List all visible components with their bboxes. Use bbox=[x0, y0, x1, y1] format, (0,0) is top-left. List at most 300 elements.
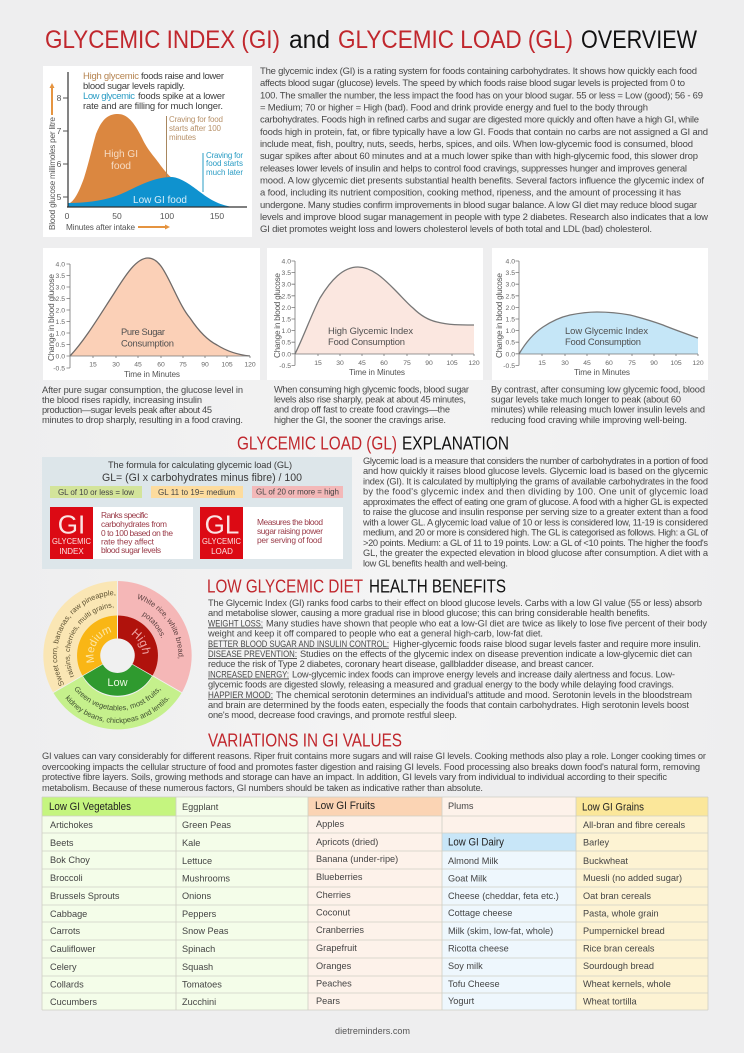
x tick labels: 15 bbox=[89, 362, 97, 368]
column: fruits: Oranges bbox=[316, 961, 352, 971]
high GI craving note: starts after 100 bbox=[169, 124, 222, 133]
area labels: High GI bbox=[104, 149, 138, 160]
chart intro text: foods raise and lower bbox=[141, 71, 224, 82]
column: vegetables continued: Squash bbox=[182, 962, 213, 972]
segment: medium: raisins, cherries, multi grains, bbox=[65, 604, 114, 678]
axis labels bbox=[47, 274, 180, 379]
pill: medium: GL 11 to 19= medium bbox=[158, 488, 235, 497]
y tick labels: 4.0 bbox=[506, 258, 515, 266]
high GI craving note: Craving for food bbox=[169, 115, 223, 124]
y tick labels: 1.0 bbox=[56, 330, 65, 338]
card: GL: Measures the blood bbox=[257, 517, 323, 527]
column: plums and dairy: Milk (skim, low-fat, whole) bbox=[448, 926, 553, 936]
benefits paragraph: BETTER BLOOD SUGAR AND INSULIN CONTROL: bbox=[208, 639, 389, 649]
high GI craving note bbox=[166, 115, 223, 177]
column: vegetables: Artichokes bbox=[50, 820, 93, 830]
column: fruits: Apples bbox=[316, 819, 344, 829]
axis labels: Change in blood glucose bbox=[495, 273, 504, 358]
caption: low glycemic: minutes) while releasing much lower insulin levels and bbox=[491, 404, 705, 414]
y tick labels: 6 bbox=[57, 159, 62, 169]
glycemic index paragraph: levels and improve blood sugar management in people with type 2 diabetes. Research also indicates that a low bbox=[260, 212, 708, 223]
column: vegetables: Cucumbers bbox=[50, 997, 97, 1007]
column: plums and dairy: Cheese (cheddar, feta etc.) bbox=[448, 891, 559, 901]
column: grains: Rice bran cereals bbox=[583, 944, 655, 954]
x tick labels: 105 bbox=[221, 362, 233, 368]
y tick labels: 2.5 bbox=[506, 293, 515, 300]
column: vegetables: Broccoli bbox=[50, 873, 83, 883]
x tick labels: 45 bbox=[134, 362, 142, 368]
benefits paragraph: The chemical serotonin determines an individual's attitude and mood. Serotonin levels in the bloodstream bbox=[276, 690, 692, 700]
y tick labels bbox=[279, 258, 291, 370]
glycemic load paragraph: with a lower GL. A glycemic load value of 10 or less is considered low, 11-19 is considered bbox=[362, 517, 708, 527]
axis labels: Time in Minutes bbox=[124, 370, 180, 379]
area labels: Low GI food bbox=[133, 194, 187, 206]
y tick labels: 1.5 bbox=[506, 316, 515, 324]
benefits paragraph: weight and keep it off compared to people who eat a general high-carb, low-fat diet. bbox=[207, 629, 543, 639]
y tick labels: 0.5 bbox=[506, 340, 515, 347]
column: grains: Oat bran cereals bbox=[583, 891, 651, 901]
panel: pure sugar chart bbox=[43, 248, 260, 380]
column: vegetables: Cabbage bbox=[50, 909, 87, 919]
column: vegetables continued: Kale bbox=[182, 838, 200, 848]
high GI area bbox=[68, 114, 172, 207]
curve label bbox=[565, 325, 648, 347]
y tick labels: 3.0 bbox=[506, 282, 515, 289]
variations paragraph: metabolism. Because of these numerous factors, GI numbers should be taken as indicative rather than absolute. bbox=[42, 783, 483, 793]
y tick labels: 0.5 bbox=[56, 342, 65, 349]
title: OVERVIEW bbox=[581, 26, 697, 54]
column: plums and dairy: Soy milk bbox=[448, 961, 483, 971]
y tick labels: -0.5 bbox=[503, 363, 515, 370]
table: low GI foods bbox=[42, 797, 708, 1010]
caption: low glycemic: sugar levels take much longer to peak (about 60 bbox=[491, 394, 681, 404]
column: plums and dairy: Goat Milk bbox=[448, 874, 487, 884]
x tick labels: 45 bbox=[358, 360, 366, 367]
column: fruits: Apricots (dried) bbox=[316, 837, 378, 847]
axis labels: Change in blood glucose bbox=[47, 274, 56, 361]
benefits paragraph: reduce the risk of Type 2 diabetes, coronary heart disease, gallbladder disease, and breast cancer. bbox=[208, 659, 594, 669]
benefits paragraph: WEIGHT LOSS: bbox=[208, 618, 263, 628]
card: GL bbox=[200, 507, 343, 559]
benefits paragraph: The Glycemic Index (GI) ranks food carbs to their effect on blood glucose levels. Carbs with a low GI value (55 or less) absorb bbox=[208, 598, 702, 608]
heading: glycemic load explanation bbox=[237, 434, 509, 454]
low glycemic curve bbox=[519, 312, 698, 354]
column: vegetables continued: Peppers bbox=[182, 909, 217, 919]
x tick labels: 30 bbox=[336, 360, 344, 367]
card: GI: rate they affect bbox=[101, 536, 155, 546]
area labels: food bbox=[111, 161, 131, 172]
high GI craving note: minutes bbox=[169, 133, 196, 142]
x tick labels: 15 bbox=[314, 360, 322, 367]
column: grains: Wheat tortilla bbox=[583, 996, 638, 1006]
glycemic load paragraph: by the food's glycemic index and then dividing by 100. One unit of glycemic load bbox=[363, 487, 708, 497]
column: vegetables continued: Eggplant bbox=[182, 802, 219, 812]
column: grains: All-bran and fibre cereals bbox=[583, 820, 686, 830]
benefits paragraph: and brain are determined by the foods eaten, especially the foods that contain carbohydrates. High serotonin levels boost bbox=[208, 700, 689, 710]
benefits paragraph: Many studies have shown that people who eat a low-GI diet are twice as likely to lose five percent of their body bbox=[266, 618, 707, 628]
column: fruits: Cherries bbox=[316, 890, 351, 900]
glycemic load paragraph: to raise the glucose and insulin response per serving size to a greater extent than a food bbox=[363, 507, 708, 517]
glycemic index paragraph: a food, including its nutrient composition, cooking method, ripeness, and the amount of processing it has bbox=[260, 188, 681, 199]
heading: low glycemic diet benefits bbox=[207, 576, 506, 596]
pill: high bbox=[252, 486, 343, 498]
glycemic index paragraph: 100. The smaller the number, the less impact the food has on your blood sugar. 55 or less = Low (good); 56 - 69 bbox=[260, 90, 703, 101]
variations paragraph: GI values can vary considerably for different reasons. Riper fruit contains more sugars and will raise GI levels. Cooking methods also play a role. Longer cooking times or bbox=[42, 751, 706, 761]
card: GL: per serving of food bbox=[257, 535, 322, 545]
y tick labels: 3.5 bbox=[56, 273, 65, 280]
column: vegetables: Cauliflower bbox=[50, 944, 95, 954]
formula text: GL= (GI x carbohydrates minus fibre) / 100 bbox=[102, 472, 302, 484]
caption: low glycemic: By contrast, after consuming low glycemic food, blood bbox=[491, 384, 705, 394]
x tick labels: 45 bbox=[583, 360, 591, 367]
x tick labels: 105 bbox=[670, 360, 682, 367]
benefits paragraph: Low-glycemic index foods can improve energy levels and increase daily alertness and focus. Low- bbox=[292, 669, 675, 679]
column: fruits: Cranberries bbox=[316, 925, 364, 935]
column: grains bbox=[582, 802, 686, 1006]
column: fruits: Grapefruit bbox=[316, 943, 357, 953]
column: grains: Wheat kernels, whole bbox=[583, 979, 671, 989]
y tick labels: 1.0 bbox=[282, 328, 291, 335]
x tick labels: 30 bbox=[112, 362, 120, 368]
glycemic load paragraph: index (GI). It is calculated by multiplying the grams of available carbohydrates in the food bbox=[363, 476, 708, 486]
column: grains: Muesli (no added sugar) bbox=[583, 873, 682, 883]
pill: high: GL of 20 or more = high bbox=[256, 488, 339, 496]
column: grains: Buckwheat bbox=[583, 856, 628, 866]
column: vegetables: Low GI Vegetables bbox=[49, 801, 131, 813]
axis labels: Change in blood glucose bbox=[273, 273, 282, 358]
caption: pure sugar: minutes to drop sharply, resulting in a food craving. bbox=[42, 415, 243, 425]
card: GI: blood sugar levels bbox=[101, 545, 161, 555]
x tick labels bbox=[65, 211, 224, 221]
heading: variations in GI values: VARIATIONS IN GI VALUES bbox=[208, 730, 402, 750]
x tick labels: 120 bbox=[468, 360, 480, 367]
column: fruits: Coconut bbox=[316, 908, 351, 918]
x tick labels: 60 bbox=[380, 360, 388, 367]
chart intro text: rate and are filling for much longer. bbox=[83, 101, 223, 112]
benefits paragraph: Higher-glycemic foods raise blood sugar levels faster and require more insulin. bbox=[393, 639, 701, 649]
card: GI: 0 to 100 based on the bbox=[101, 528, 173, 538]
x tick labels: 105 bbox=[446, 360, 458, 367]
column: vegetables: Brussels Sprouts bbox=[50, 891, 120, 901]
column: plums and dairy: Tofu Cheese bbox=[448, 979, 500, 989]
y tick labels: 3.5 bbox=[282, 270, 291, 277]
segment: high: potatoes. bbox=[142, 612, 164, 638]
column: grains: Barley bbox=[583, 838, 609, 848]
column: fruits: Pears bbox=[316, 996, 340, 1006]
y tick labels: 0.0 bbox=[282, 351, 291, 358]
segment: high bbox=[118, 581, 192, 692]
axis labels: Time in Minutes bbox=[574, 368, 630, 377]
column: vegetables continued: Snow Peas bbox=[182, 926, 229, 936]
heading: low glycemic diet benefits: LOW GLYCEMIC DIET bbox=[207, 576, 363, 596]
chart intro text: Low glycemic bbox=[83, 91, 135, 102]
chart intro text: foods spike at a lower bbox=[138, 91, 225, 102]
caption: pure sugar: After pure sugar consumption, the glucose level in bbox=[42, 385, 243, 395]
caption: high glycemic bbox=[274, 384, 469, 425]
title: and bbox=[289, 26, 330, 54]
column: grains: Pasta, whole grain bbox=[583, 908, 659, 918]
card: GI: GI bbox=[58, 510, 85, 540]
curve label: Consumption bbox=[121, 338, 174, 348]
column: vegetables: Carrots bbox=[50, 926, 81, 936]
benefits paragraph: and metabolise slower, causing a more gradual rise in blood glucose; this can bring considerable health benefits. bbox=[208, 608, 650, 618]
glycemic index paragraph: undergone. Many studies confirm improvements in blood sugar balance. A low GI diet may reduce blood sugar bbox=[260, 200, 697, 211]
y tick labels: 5 bbox=[57, 192, 62, 202]
benefits paragraph: Studies on the effects of the glycemic index on disease prevention indicate a low-glycemic diet can bbox=[300, 649, 692, 659]
y tick labels bbox=[503, 258, 515, 370]
footer: dietreminders.com bbox=[335, 1026, 410, 1036]
x tick labels: 75 bbox=[628, 360, 636, 367]
glycemic index paragraph: affects blood sugar (glucose) levels. The speed by which foods raise blood sugar levels is projected from 0 to bbox=[260, 78, 685, 89]
heading: low glycemic diet benefits: HEALTH BENEFITS bbox=[369, 576, 506, 596]
curve label: Food Consumption bbox=[565, 336, 641, 347]
y tick labels: 0.5 bbox=[282, 340, 291, 347]
column: plums and dairy: Plums bbox=[448, 801, 474, 811]
glycemic index paragraph: foods high in protein, fat, or fibre typically have a low GI. Foods that contain no carbs are not assigned a GI and bbox=[260, 127, 708, 138]
panel: low glycemic chart bbox=[492, 248, 708, 380]
area labels bbox=[104, 149, 187, 206]
column: grains: Sourdough bread bbox=[583, 961, 654, 971]
x tick labels: 60 bbox=[605, 360, 613, 367]
card: GL: sugar raising power bbox=[257, 526, 323, 536]
glycemic index paragraph: GI diet promotes weight loss and lowers cholesterol levels of both total and LDL (bad) cholesterol. bbox=[260, 224, 652, 235]
column: vegetables: Celery bbox=[50, 962, 77, 972]
glycemic load paragraph: GL, the greater the expected elevation in blood glucose after consumption. A diet with a bbox=[363, 548, 709, 558]
benefits paragraph: HAPPIER MOOD: bbox=[208, 690, 273, 700]
caption: low glycemic: reducing food craving while improving well-being. bbox=[491, 415, 687, 425]
caption: pure sugar: the blood rises rapidly, increasing insulin bbox=[42, 395, 202, 405]
y tick labels: 2.0 bbox=[506, 305, 515, 312]
low GI craving note: much later bbox=[206, 168, 243, 177]
axis labels bbox=[273, 273, 405, 377]
formula text bbox=[102, 460, 302, 484]
card: GI: carbohydrates from bbox=[101, 519, 167, 529]
card: GI: INDEX bbox=[59, 547, 84, 556]
column: vegetables continued: Mushrooms bbox=[182, 874, 230, 884]
column: fruits: Low GI Fruits bbox=[315, 800, 375, 812]
benefits paragraph: glycemic foods are digested slowly, releasing a measured and gradual energy to the body while delaying food cravings. bbox=[208, 680, 674, 690]
segment: medium: Medium bbox=[86, 627, 112, 663]
panel: blood glucose chart bbox=[43, 66, 252, 237]
low GI craving note: food starts bbox=[206, 159, 243, 168]
benefits paragraph: INCREASED ENERGY: bbox=[208, 669, 289, 679]
card: GL: GLYCEMIC bbox=[202, 537, 241, 546]
caption: pure sugar bbox=[42, 385, 243, 425]
y tick labels: 7 bbox=[57, 126, 62, 136]
x tick labels: 120 bbox=[244, 362, 256, 368]
glycemic index paragraph: include meat, fish, poultry, nuts, seeds, herbs, spices, and oils. When low-glycemic food is consumed, blood bbox=[260, 139, 693, 150]
low GI craving note: Craving for bbox=[206, 151, 243, 160]
segment: low: Green vegetables, most fruits, bbox=[75, 686, 162, 710]
y tick labels: 2.5 bbox=[56, 296, 65, 303]
column: vegetables: Beets bbox=[50, 838, 74, 848]
axis labels: Time in Minutes bbox=[349, 368, 405, 377]
y tick labels: 3.0 bbox=[282, 282, 291, 289]
column: fruits: Blueberries bbox=[316, 872, 363, 882]
low GI area bbox=[68, 177, 233, 207]
glycemic index paragraph: releases lower levels of insulin and helps to control food cravings, suppresses hunger and improves general bbox=[260, 163, 687, 174]
column: vegetables: Bok Choy bbox=[50, 855, 90, 865]
x tick labels: 15 bbox=[538, 360, 546, 367]
chart intro text: High glycemic bbox=[83, 71, 139, 82]
y tick labels: 2.5 bbox=[282, 293, 291, 300]
segment: high: High bbox=[132, 628, 150, 654]
card: GI: Ranks specific bbox=[101, 510, 148, 520]
column: vegetables continued: Zucchini bbox=[182, 997, 216, 1007]
column: fruits: Banana (under-ripe) bbox=[316, 854, 398, 864]
curve label: Pure Sugar bbox=[121, 326, 165, 337]
high glycemic curve bbox=[295, 267, 474, 354]
card: GI: GLYCEMIC bbox=[52, 537, 91, 546]
variations paragraph: overcooking impacts the cellular structure of food and promotes faster digestion and raising GI levels. Food processing also breaks down food's natural form, removing bbox=[42, 762, 700, 772]
column: vegetables continued: Green Peas bbox=[182, 820, 231, 830]
card: GI bbox=[50, 507, 193, 559]
y tick labels: 3.0 bbox=[56, 284, 65, 292]
y tick labels: 2.0 bbox=[56, 308, 65, 314]
glycemic load paragraph: medium, and 20 or more is considered high. The GL is categorised as follows. High: a GL of bbox=[363, 528, 708, 538]
benefits paragraph: DISEASE PREVENTION: bbox=[208, 649, 297, 659]
x tick labels: 90 bbox=[425, 360, 433, 367]
segment: medium: Sweet corn, bananas, raw pineapple, bbox=[52, 590, 116, 686]
chart intro text bbox=[83, 71, 225, 112]
formula text: The formula for calculating glycemic load (GL) bbox=[108, 460, 292, 470]
y tick labels: 0.0 bbox=[506, 351, 515, 358]
benefits paragraph: one's mood, decrease food cravings, and promote restful sleep. bbox=[208, 710, 457, 720]
chart: glycemic food wheel bbox=[43, 581, 192, 730]
column: plums and dairy: Almond Milk bbox=[448, 856, 498, 866]
axes bbox=[63, 72, 247, 207]
column: grains: Pumpernickel bread bbox=[583, 926, 665, 936]
card: GL: GL bbox=[205, 510, 239, 540]
glycemic index paragraph: The glycemic index (GI) is a rating system for foods containing carbohydrates. It shows how quickly each food bbox=[260, 66, 697, 77]
x tick labels: 0 bbox=[65, 211, 70, 221]
y tick labels: 0.0 bbox=[56, 354, 65, 360]
column: fruits: Peaches bbox=[316, 978, 352, 988]
glycemic load paragraph bbox=[362, 456, 709, 568]
column: plums and dairy: Cottage cheese bbox=[448, 908, 512, 918]
y tick labels: 4.0 bbox=[56, 262, 65, 268]
glycemic index paragraph bbox=[260, 66, 708, 235]
x axis label with arrow: Minutes after intake bbox=[66, 223, 135, 232]
column: vegetables continued bbox=[182, 802, 231, 1007]
title: GLYCEMIC LOAD (GL) bbox=[338, 26, 573, 54]
column: fruits bbox=[315, 800, 398, 1006]
x tick labels: 30 bbox=[561, 360, 569, 367]
glycemic index paragraph: sugar spikes after about 60 minutes and at a much lower spike than with high-glycemic food, this slower drop bbox=[260, 151, 698, 162]
segment: low: kidney beans, chickpeas and lentils. bbox=[66, 695, 170, 724]
y tick labels: 2.0 bbox=[282, 305, 291, 312]
panel: high glycemic chart bbox=[267, 248, 483, 380]
variations paragraph: protective fibre layers. Soils, growing methods and storage can have an impact. In addition, GI levels vary from individual to individual according to their specific bbox=[42, 772, 667, 782]
segment: low bbox=[54, 664, 182, 730]
glycemic load paragraph: >20 points. Medium: a GL of 11 to 19 points. Low: a GL of <10 points. The higher the food's bbox=[363, 538, 708, 548]
x tick labels: 100 bbox=[160, 211, 174, 221]
glycemic load paragraph: Glycemic load is a measure that considers the number of carbohydrates in a portion of food bbox=[363, 456, 708, 466]
x tick labels: 90 bbox=[201, 362, 209, 368]
column: vegetables continued: Tomatoes bbox=[182, 980, 222, 990]
panel: glycemic load formula bbox=[42, 457, 352, 569]
x tick labels: 60 bbox=[157, 362, 165, 368]
y tick labels: 1.0 bbox=[506, 328, 515, 335]
x tick labels bbox=[314, 360, 480, 367]
y tick labels: 1.5 bbox=[56, 319, 65, 326]
title bbox=[45, 26, 697, 54]
title: GLYCEMIC INDEX (GI) bbox=[45, 26, 280, 54]
pill: low bbox=[50, 486, 142, 498]
x tick labels: 50 bbox=[112, 211, 122, 221]
x tick labels bbox=[89, 362, 256, 368]
y tick labels bbox=[53, 262, 65, 372]
column: vegetables continued: Spinach bbox=[182, 944, 215, 954]
heading: glycemic load explanation: EXPLANATION bbox=[402, 434, 509, 454]
curve label bbox=[328, 325, 413, 347]
pill: medium bbox=[151, 486, 243, 498]
x tick labels bbox=[538, 360, 704, 367]
column: grains: Low GI Grains bbox=[582, 802, 644, 814]
pill: low: GL of 10 or less = low bbox=[58, 488, 134, 497]
segment: low: Low bbox=[107, 677, 128, 689]
glycemic load paragraph: low GL benefits health and well-being. bbox=[363, 558, 508, 568]
column: vegetables bbox=[49, 801, 131, 1007]
axis labels bbox=[495, 273, 630, 377]
column: vegetables: Collards bbox=[50, 980, 84, 990]
y tick labels: 1.5 bbox=[282, 316, 291, 324]
glycemic index paragraph: carbohydrates. Foods high in refined carbs and sugar are digested more quickly and often have a high GI, while bbox=[260, 115, 699, 126]
x tick labels: 90 bbox=[650, 360, 658, 367]
glycemic load paragraph: and how quickly it raises blood glucose levels. Glycemic load is based on the glycemic bbox=[363, 466, 708, 476]
column backgrounds bbox=[42, 797, 708, 1010]
x tick labels: 75 bbox=[403, 360, 411, 367]
segment: high: White rice, white bread, bbox=[138, 594, 184, 658]
benefits paragraph bbox=[207, 598, 707, 720]
curve label: Food Consumption bbox=[328, 336, 405, 347]
y tick labels: -0.5 bbox=[279, 363, 291, 370]
x axis label with arrow bbox=[66, 223, 170, 232]
x tick labels: 150 bbox=[210, 211, 224, 221]
curve label: High Glycemic Index bbox=[328, 325, 413, 336]
column: vegetables continued: Lettuce bbox=[182, 856, 212, 866]
column: plums and dairy: Yogurt bbox=[448, 996, 475, 1006]
card: GL: LOAD bbox=[211, 547, 233, 556]
y tick labels: 8 bbox=[57, 93, 62, 103]
glycemic load paragraph: approximates the effect of eating one gram of glucose. A food with a higher GL is expected bbox=[363, 497, 708, 507]
x tick labels: 120 bbox=[692, 360, 704, 367]
column: plums and dairy bbox=[448, 801, 559, 1006]
caption: pure sugar: production—sugar levels peak after about 45 bbox=[42, 405, 212, 415]
pure sugar curve bbox=[70, 258, 250, 356]
y tick labels: -0.5 bbox=[53, 366, 65, 372]
caption: high glycemic: levels also rise sharply, peak at about 45 minutes, bbox=[274, 394, 466, 404]
y tick labels: 4.0 bbox=[282, 258, 291, 266]
low GI craving note bbox=[203, 151, 243, 192]
column: plums and dairy: Low GI Dairy bbox=[448, 836, 505, 848]
column: vegetables continued: Onions bbox=[182, 891, 212, 901]
y tick labels bbox=[57, 93, 62, 202]
variations paragraph bbox=[42, 751, 706, 793]
y axis label with arrow: Blood glucose millimoles per litre bbox=[48, 117, 57, 230]
x tick labels: 75 bbox=[179, 362, 187, 368]
glycemic index paragraph: = Medium; 70 or higher = High (bad). Food and drink provide energy and fuel to the body through bbox=[260, 102, 648, 114]
glycemic index paragraph: mood. A low glycemic diet presents substantial health benefits. Several factors influence the glycemic index of bbox=[260, 176, 704, 186]
chart intro text: blood sugar levels rapidly. bbox=[83, 81, 185, 92]
caption: low glycemic bbox=[491, 384, 705, 425]
caption: high glycemic: and drop off fast to create food cravings—the bbox=[274, 404, 450, 414]
curve label bbox=[121, 326, 174, 348]
heading: glycemic load explanation: GLYCEMIC LOAD (GL) bbox=[237, 434, 397, 454]
y tick labels: 3.5 bbox=[506, 270, 515, 277]
caption: high glycemic: higher the GI, the sooner the cravings arise. bbox=[274, 415, 446, 425]
curve label: Low Glycemic Index bbox=[565, 325, 648, 336]
